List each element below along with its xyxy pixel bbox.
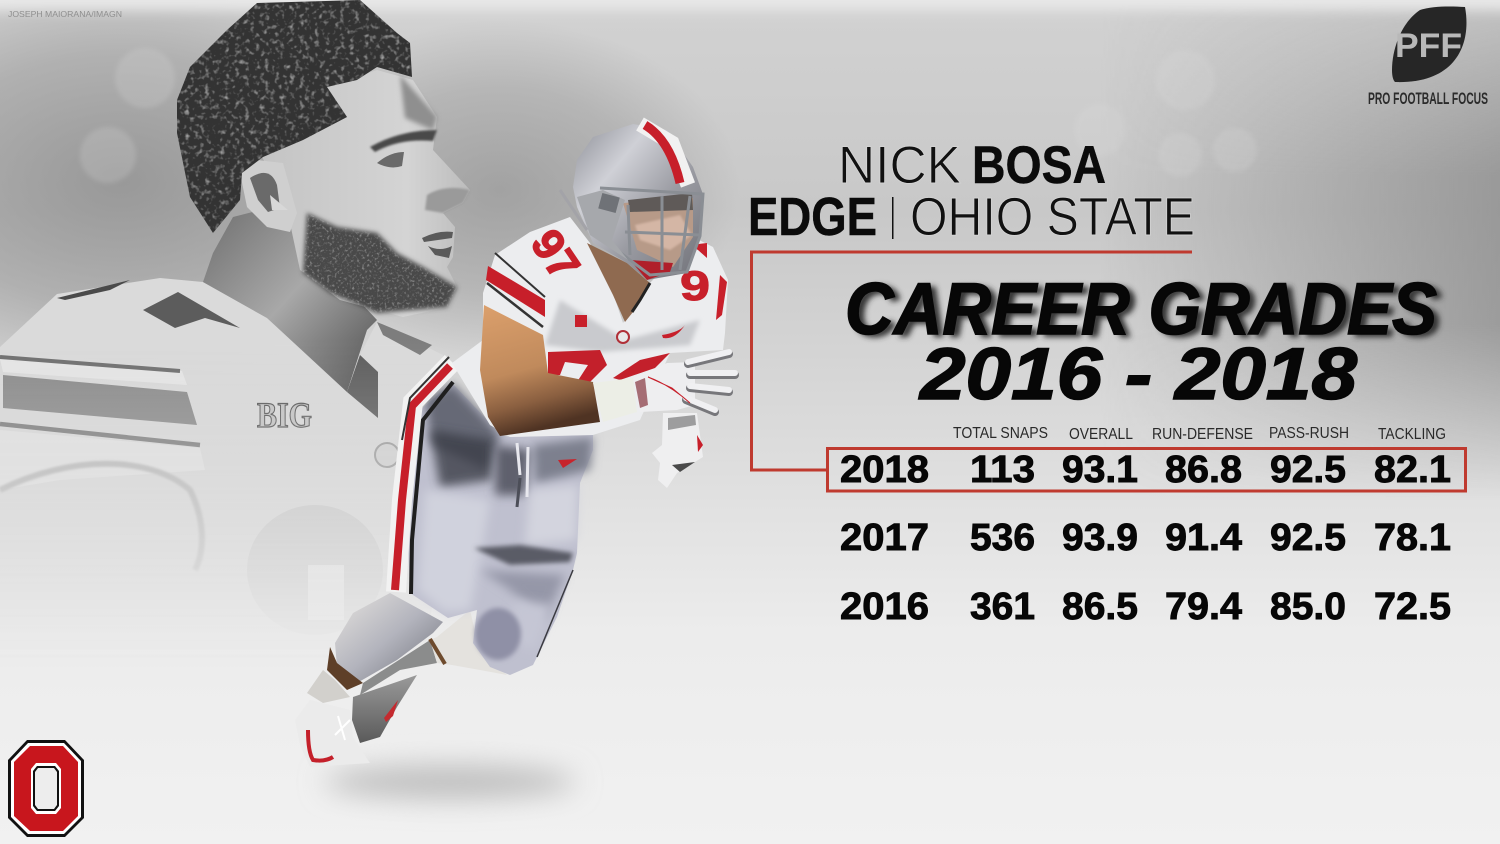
table row: 2016: 72.5	[1374, 586, 1451, 628]
lower glove	[652, 413, 703, 488]
table row: 2018: 113	[970, 449, 1035, 491]
table row: 2016: 2016	[840, 586, 929, 628]
pants	[408, 383, 593, 675]
helmet	[560, 124, 704, 280]
antenna	[560, 190, 587, 230]
portrait hair	[177, 0, 412, 233]
title: player name: NICK	[838, 136, 961, 195]
portrait jersey	[0, 278, 432, 595]
table column headers: TACKLING	[1378, 426, 1446, 443]
sleeve stripes	[486, 253, 545, 327]
table row: 2018: 2018	[840, 449, 929, 491]
helmet flap	[577, 190, 628, 260]
logo: PFF football: PFF	[1395, 27, 1462, 65]
upper glove	[633, 352, 735, 412]
subtitle: position and school	[748, 187, 1195, 247]
table column headers: RUN-DEFENSE	[1152, 426, 1253, 443]
portrait nose	[425, 188, 470, 213]
portrait forehead temple shade	[400, 75, 437, 130]
ground shadow	[325, 766, 575, 798]
table row: 2018: 93.1	[1062, 449, 1138, 491]
table row: 2017: 92.5	[1270, 517, 1346, 559]
table column headers: OVERALL	[1069, 426, 1133, 443]
table row: 2016: 86.5	[1062, 586, 1138, 628]
portrait: grayscale player profile	[0, 0, 470, 595]
portrait neck	[203, 200, 377, 392]
table row: 2018	[840, 449, 1451, 491]
subtitle: position and school: OHIO STATE	[910, 187, 1195, 247]
wrist tape	[593, 378, 637, 422]
heading: career grades	[845, 269, 1443, 415]
chest number 9: 9	[680, 262, 710, 309]
pant stripes	[395, 357, 453, 594]
shoulder number: 97	[521, 221, 589, 289]
front shoe	[295, 700, 370, 767]
highlight box: 2018	[828, 448, 1466, 491]
photo credit: JOSEPH MAIORANA/IMAGN	[8, 9, 122, 19]
table row: 2018: 82.1	[1374, 449, 1451, 491]
table row: 2016: 361	[970, 586, 1035, 628]
subtitle: position and school: EDGE	[748, 187, 877, 247]
face opening	[623, 198, 693, 267]
jersey	[452, 217, 728, 437]
title: player name	[838, 136, 1106, 195]
front shin and sock	[360, 610, 507, 695]
table column headers: TOTAL SNAPS	[953, 425, 1048, 442]
portrait beard	[303, 213, 457, 313]
portrait ear	[242, 160, 292, 232]
heading: career grades: CAREER GRADES	[851, 272, 1443, 353]
logo: Ohio State block O	[8, 740, 84, 837]
heading: career grades: CAREER GRADES	[845, 269, 1437, 350]
logo: PFF football	[1368, 6, 1488, 108]
heading: career grades: 2016 - 2018	[918, 334, 1357, 415]
facemask	[600, 188, 703, 275]
table row: 2016	[840, 586, 1451, 628]
neck skin	[587, 243, 650, 322]
table row: 2018: 86.8	[1165, 449, 1242, 491]
red connector frame	[752, 252, 1192, 470]
table row: 2017: 78.1	[1374, 517, 1451, 559]
rear leg	[307, 593, 443, 703]
back shoe	[352, 675, 417, 743]
chin strap	[630, 260, 673, 280]
portrait eye and brow	[370, 130, 437, 167]
table column headers: PASS-RUSH	[1269, 425, 1349, 442]
table row: 2017	[840, 517, 1451, 559]
table row: 2017: 91.4	[1165, 517, 1242, 559]
title: player name: BOSA	[972, 136, 1106, 195]
table row: 2017: 536	[970, 517, 1035, 559]
table row: 2018: 92.5	[1270, 449, 1346, 491]
table column headers	[953, 425, 1446, 443]
table row: 2016: 79.4	[1165, 586, 1242, 628]
portrait lips	[422, 232, 453, 258]
portrait face	[262, 70, 470, 317]
table row: 2016: 85.0	[1270, 586, 1346, 628]
table row: 2017: 2017	[840, 517, 929, 559]
action player	[295, 124, 735, 767]
table row: 2017: 93.9	[1062, 517, 1138, 559]
chest number	[548, 350, 607, 382]
portrait BIG patch: BIG	[257, 395, 312, 435]
big ten patch and logo	[575, 315, 587, 327]
arm	[480, 305, 600, 436]
